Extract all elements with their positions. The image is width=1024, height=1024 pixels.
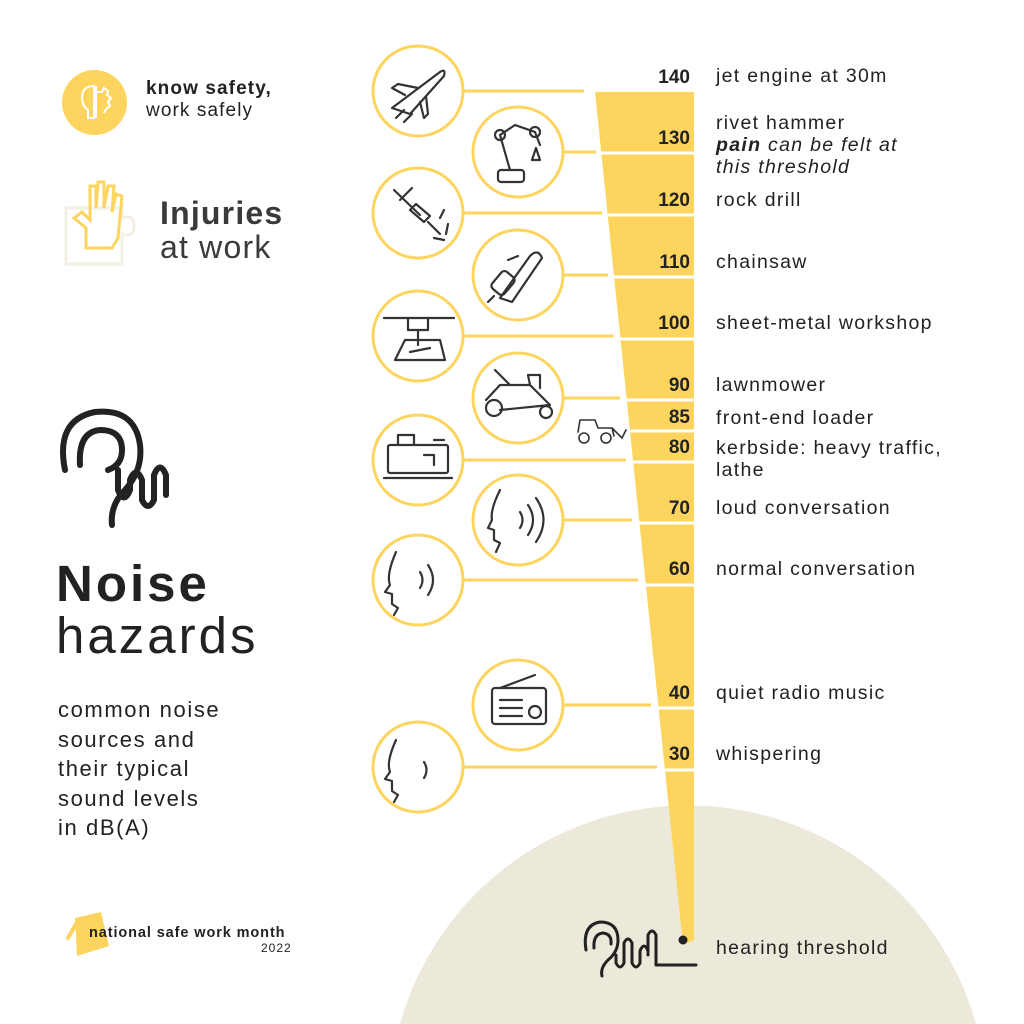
numbers: 30 bbox=[669, 744, 690, 765]
labels: rivet hammer bbox=[716, 112, 845, 134]
subtitle: their typical bbox=[58, 756, 190, 781]
logo: injuries at work: Injuries bbox=[160, 195, 283, 231]
numbers: 120 bbox=[658, 190, 690, 211]
labels: this threshold bbox=[716, 156, 850, 178]
connector lines bbox=[462, 91, 657, 767]
labels: jet engine at 30m bbox=[716, 65, 888, 87]
labels: rock drill bbox=[716, 189, 802, 211]
icon: radio bbox=[492, 675, 546, 724]
logo: national safe work month: national safe work month bbox=[89, 925, 285, 941]
labels: lawnmower bbox=[716, 374, 826, 396]
numbers: 80 bbox=[669, 437, 690, 458]
labels: front-end loader bbox=[716, 407, 874, 429]
wedge bbox=[590, 92, 700, 945]
icons inside circles bbox=[63, 71, 696, 976]
numbers: 60 bbox=[669, 559, 690, 580]
icon: mower bbox=[486, 370, 552, 418]
icon: whisper face bbox=[385, 740, 426, 802]
numbers: 100 bbox=[658, 313, 690, 334]
numbers bbox=[658, 67, 690, 765]
labels: chainsaw bbox=[716, 251, 808, 273]
labels: whispering bbox=[716, 743, 822, 765]
title: Noise bbox=[56, 555, 210, 612]
logo: national safe work month: 2022 bbox=[261, 941, 292, 955]
icon: lathe bbox=[384, 435, 452, 478]
labels: normal conversation bbox=[716, 558, 916, 580]
icon: loader bbox=[578, 420, 626, 443]
background semicircle bbox=[400, 805, 976, 1024]
numbers: 85 bbox=[669, 407, 690, 428]
title bbox=[56, 555, 258, 664]
logo: national safe work month bbox=[66, 912, 292, 956]
labels: sheet-metal workshop bbox=[716, 312, 933, 334]
numbers: 140 bbox=[658, 67, 690, 88]
icon: rock drill bbox=[394, 188, 448, 240]
subtitle: in dB(A) bbox=[58, 815, 150, 840]
logo: know safety: know safety, bbox=[146, 78, 272, 99]
subtitle: sources and bbox=[58, 726, 195, 752]
labels: kerbside: heavy traffic, bbox=[716, 437, 942, 459]
labels: quiet radio music bbox=[716, 682, 886, 704]
numbers: 130 bbox=[658, 128, 690, 149]
logo: injuries at work bbox=[64, 180, 283, 266]
icon: talking face bbox=[488, 490, 544, 552]
icon: small ear bbox=[585, 922, 696, 976]
subtitle: common noise bbox=[58, 697, 220, 722]
icon circles bbox=[373, 46, 563, 812]
numbers: 40 bbox=[669, 683, 690, 704]
subtitle bbox=[58, 697, 220, 840]
icon: jet bbox=[392, 71, 444, 122]
numbers: 70 bbox=[669, 498, 690, 519]
icon: workshop bbox=[384, 318, 454, 360]
subtitle: sound levels bbox=[58, 786, 200, 810]
numbers: 110 bbox=[659, 252, 690, 273]
logo: know safety bbox=[62, 70, 272, 135]
labels: lathe bbox=[716, 459, 765, 481]
icon: big ear bbox=[63, 412, 166, 525]
icon: robot arm bbox=[495, 125, 540, 182]
labels: pain can be felt at bbox=[716, 134, 898, 156]
icon: chainsaw bbox=[488, 252, 542, 302]
title: hazards bbox=[56, 607, 258, 664]
logo: know safety: work safely bbox=[146, 100, 253, 121]
labels: loud conversation bbox=[716, 497, 891, 519]
numbers: 90 bbox=[669, 375, 690, 396]
icon: talking face 2 bbox=[385, 552, 433, 615]
logo: injuries at work: at work bbox=[160, 229, 272, 265]
labels bbox=[716, 65, 942, 959]
labels: hearing threshold bbox=[716, 937, 889, 959]
